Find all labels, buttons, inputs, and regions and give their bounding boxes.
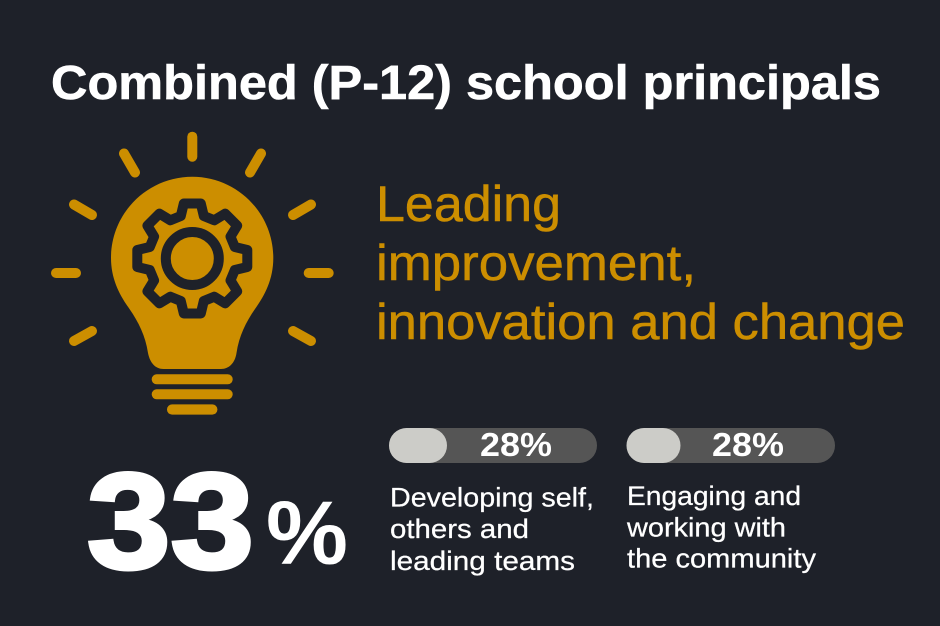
stat bar: engaging community 28% <box>626 426 835 463</box>
text: developing self, others and leading teams <box>390 482 594 576</box>
heading: leading improvement, innovation and change <box>376 176 905 350</box>
main statistic: 33%: 33 <box>87 445 254 597</box>
icon: light rays <box>56 137 329 341</box>
main statistic: 33%: % <box>266 484 348 584</box>
title: Combined (P-12) school principals <box>51 57 881 110</box>
icon: gear <box>137 204 247 314</box>
stat bar: developing self 28%: 28% <box>480 426 552 463</box>
text: engaging and working with the community: Engaging and <box>627 481 801 511</box>
icon: light bulb with gear <box>56 137 329 415</box>
icon: bulb glass <box>111 177 273 369</box>
text: developing self, others and leading teams: Developing self, <box>390 482 594 512</box>
heading: leading improvement, innovation and change: innovation and change <box>376 294 905 350</box>
text: engaging and working with the community: the community <box>627 544 817 574</box>
heading: leading improvement, innovation and change: improvement, <box>376 235 696 291</box>
main statistic: 33% <box>87 445 348 597</box>
stat bar: engaging community 28%: 28% <box>712 426 784 463</box>
icon: bulb base <box>152 374 233 415</box>
stat bar: developing self 28% <box>389 426 597 463</box>
text: developing self, others and leading teams: leading teams <box>390 546 575 576</box>
text: engaging and working with the community: working with <box>626 512 786 542</box>
text: developing self, others and leading teams: others and <box>390 514 529 544</box>
heading: leading improvement, innovation and change: Leading <box>376 176 561 232</box>
text: engaging and working with the community <box>626 481 817 574</box>
